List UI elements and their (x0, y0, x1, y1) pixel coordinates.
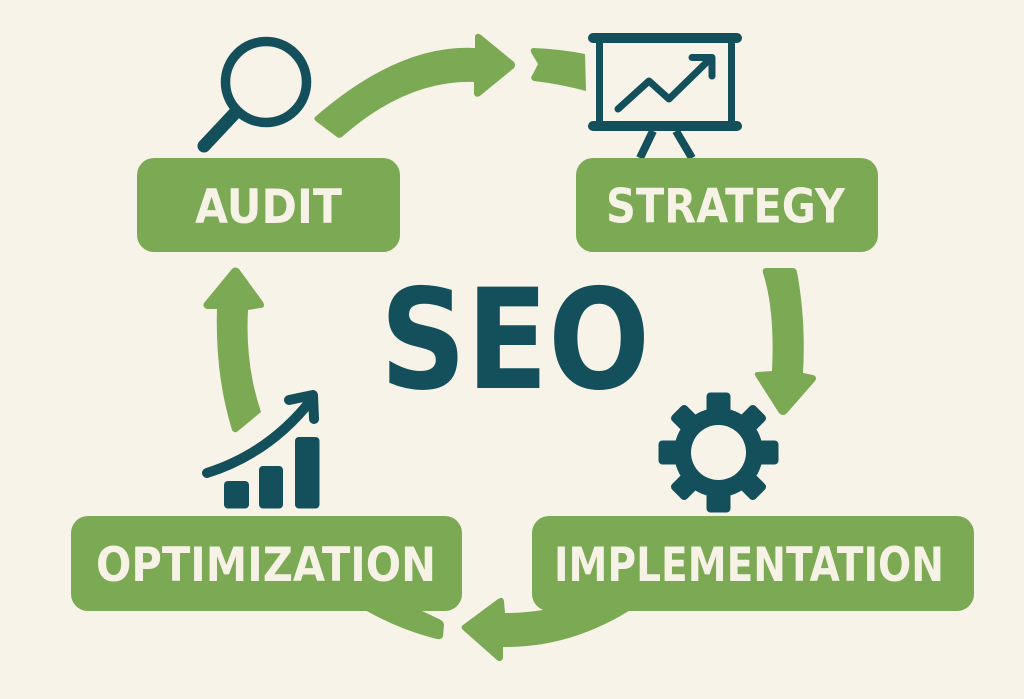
pill: audit (137, 158, 400, 252)
label: strategy: STRATEGY (606, 180, 846, 234)
icon: gear (658, 392, 778, 512)
arrow: implementation to optimization (462, 598, 632, 661)
center title: SEO (380, 259, 650, 421)
bar 1 (224, 481, 249, 508)
arrow: optimization to audit (203, 268, 264, 432)
pill: strategy (576, 158, 878, 252)
label: implementation: IMPLEMENTATION (554, 538, 944, 593)
label: optimization: OPTIMIZATION (96, 538, 436, 593)
icon: presentation board with rising chart (593, 38, 737, 158)
label: audit: AUDIT (195, 180, 342, 235)
speech tail (365, 610, 444, 639)
arrow: audit to strategy (314, 34, 515, 138)
arrow: strategy to implementation (755, 268, 816, 415)
icon: magnifying glass (204, 42, 306, 146)
arrow: tail fragment entering strategy (531, 48, 586, 91)
pill: optimization with tail (71, 516, 462, 639)
trend arrow (207, 395, 314, 473)
bar 3 (295, 437, 320, 508)
icon: growth bars with arrow (207, 395, 320, 508)
pill: implementation with arrow to optimization (462, 516, 974, 661)
bar 2 (259, 466, 283, 508)
